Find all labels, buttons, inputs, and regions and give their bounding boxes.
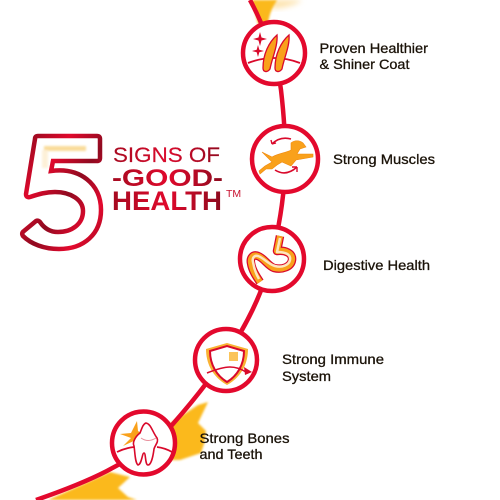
badge: coat [243,22,305,84]
heading: 5 signs of good health: -GOOD- [112,165,223,192]
curved red timeline [36,0,285,500]
icon: running dog [259,138,313,174]
label: bones and teeth [200,430,290,462]
yellow paint splash: top [252,0,302,24]
icon: shield [206,343,252,385]
label: coat [320,40,428,72]
badge: digestive [240,227,304,291]
label: coat: Proven Healthier [320,40,428,56]
label: muscles: Strong Muscles [333,151,435,167]
yellow highlight in 5 [42,146,86,168]
heading: 5 signs of good health [112,143,241,216]
big number 5 [22,136,101,249]
badge: bones and teeth [112,412,175,474]
icon: tooth and gum [117,421,172,465]
label: bones and teeth: and Teeth [200,446,262,462]
badge: muscles [252,126,318,192]
icon: hair and sparkles [248,32,300,72]
label: bones and teeth: Strong Bones [200,430,290,446]
label: digestive: Digestive Health [323,257,430,273]
heading: 5 signs of good health: SIGNS OF [113,143,220,167]
heading: 5 signs of good health: TM [226,188,241,200]
label: immune: System [282,368,331,384]
heading: 5 signs of good health: HEALTH [112,186,222,216]
yellow paint splash: bottom [48,472,137,500]
label: immune [282,351,384,384]
label: coat: & Shiner Coat [320,56,410,72]
icon: stomach [251,236,292,282]
yellow paint splash: lower right [160,402,208,460]
badge: immune [195,329,257,391]
label: immune: Strong Immune [282,351,384,367]
